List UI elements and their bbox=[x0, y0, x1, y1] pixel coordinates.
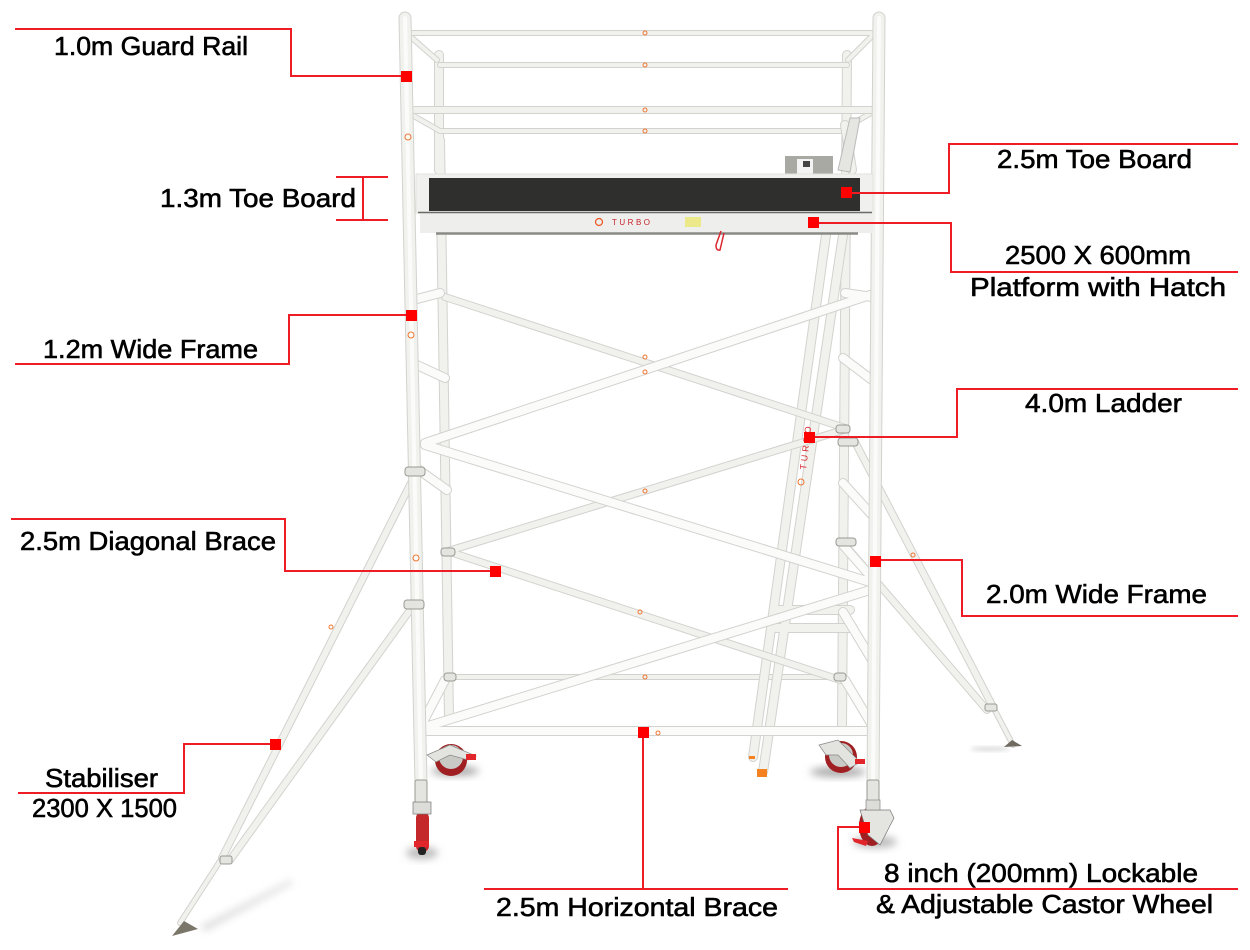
callout: 1.0m guard rail bbox=[15, 29, 412, 82]
scaffold tower bbox=[172, 18, 1022, 936]
callout: 2.0m wide frame: 2.0m Wide Frame bbox=[986, 579, 1207, 609]
callout: platform with hatch: Platform with Hatch bbox=[970, 272, 1226, 302]
red hook bbox=[716, 231, 724, 250]
orange ladder tips bbox=[749, 756, 767, 777]
ladder lettering: TURBO bbox=[798, 423, 814, 470]
castor: back right bbox=[819, 740, 865, 773]
callout: platform with hatch: 2500 X 600mm bbox=[1005, 240, 1191, 270]
callout: stabiliser bbox=[18, 739, 281, 823]
callout: 2.5m horizontal brace bbox=[484, 727, 788, 922]
callout: 2.5m diagonal brace: 2.5m Diagonal Brace bbox=[20, 526, 276, 556]
callout: 1.3m toe board bbox=[160, 177, 388, 220]
callout: 2.5m toe board: 2.5m Toe Board bbox=[997, 144, 1192, 174]
callout: 2.5m horizontal brace: 2.5m Horizontal Brace bbox=[496, 892, 778, 922]
callout: castor wheel bbox=[838, 822, 1238, 919]
stabiliser foot: left bbox=[172, 921, 198, 936]
callout: 2.5m diagonal brace bbox=[11, 519, 501, 577]
callout: stabiliser: 2300 X 1500 bbox=[32, 793, 177, 823]
callout: 2.5m toe board bbox=[841, 144, 1238, 198]
rail logo marks bbox=[329, 31, 915, 735]
callout: 1.0m guard rail: 1.0m Guard Rail bbox=[54, 31, 248, 61]
callout: 1.2m wide frame bbox=[15, 310, 417, 364]
back posts and tubes bbox=[180, 18, 1013, 923]
callout: 2.0m wide frame bbox=[870, 556, 1238, 616]
callout: 4.0m ladder: 4.0m Ladder bbox=[1025, 388, 1182, 418]
platform with hatch bbox=[416, 174, 873, 250]
clamps and joints bbox=[220, 425, 997, 864]
castor: front left bbox=[413, 802, 431, 855]
callout: 4.0m ladder bbox=[804, 388, 1238, 443]
safety sticker bbox=[685, 217, 701, 227]
callout: castor wheel: 8 inch (200mm) Lockable bbox=[884, 858, 1198, 888]
stabiliser foot: right bbox=[1004, 740, 1022, 747]
castor: front right bbox=[852, 800, 894, 846]
ground shadows bbox=[200, 747, 1010, 932]
callout: 1.2m wide frame: 1.2m Wide Frame bbox=[43, 334, 258, 364]
callout: castor wheel: & Adjustable Castor Wheel bbox=[876, 889, 1213, 919]
castor: back left bbox=[427, 744, 476, 776]
callout: 1.3m toe board: 1.3m Toe Board bbox=[160, 183, 356, 213]
turbo logo: TURBO bbox=[612, 218, 652, 227]
callout: platform with hatch bbox=[808, 217, 1238, 302]
toe board panel bbox=[429, 178, 860, 211]
ladder hinge and hatch hardware bbox=[785, 118, 860, 174]
callout: stabiliser: Stabiliser bbox=[45, 763, 158, 793]
